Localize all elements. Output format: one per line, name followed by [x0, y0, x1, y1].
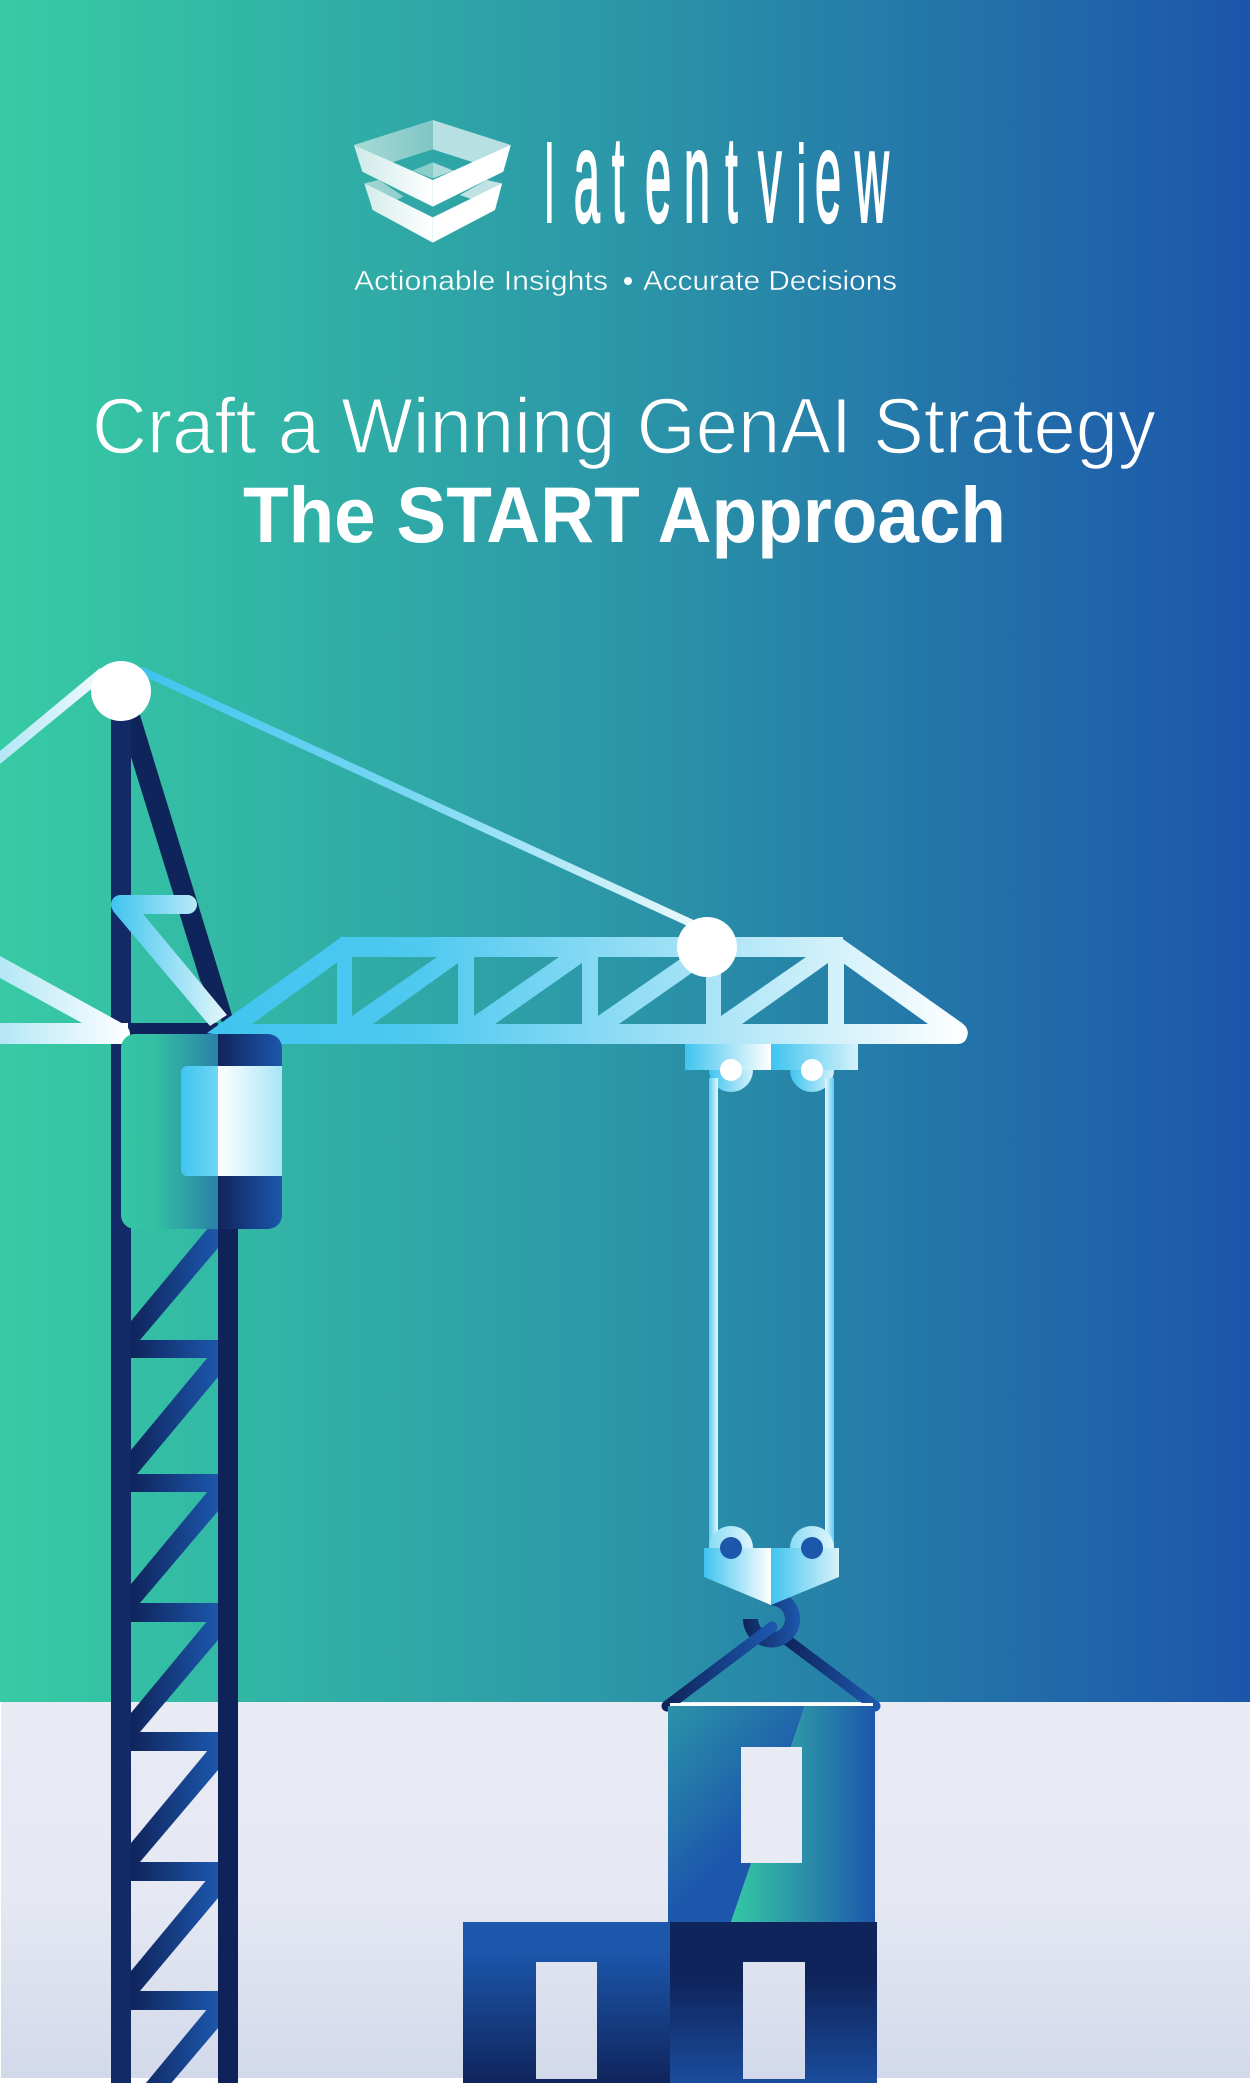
logo wordmark: w — [855, 104, 889, 249]
hook block — [704, 1526, 839, 1605]
logo wordmark: l — [545, 126, 554, 245]
tagline: Actionable Insights — [354, 265, 608, 296]
containers — [463, 1703, 877, 2083]
heading line two: The START Approach — [243, 470, 1006, 559]
logo wordmark: i — [797, 126, 806, 245]
lower right container — [670, 1922, 877, 2083]
lower left container — [463, 1922, 670, 2083]
hook — [750, 1598, 792, 1640]
main cable — [140, 670, 695, 925]
hoist ropes — [709, 1078, 834, 1548]
logo wordmark: v — [758, 104, 782, 249]
back jib upper tie — [0, 668, 112, 764]
boom pivot — [677, 917, 737, 977]
tagline — [354, 265, 897, 296]
right mast — [218, 1200, 238, 2083]
mast lattice — [131, 1216, 218, 2083]
logo wordmark: t — [725, 112, 738, 248]
trolley — [685, 1044, 858, 1092]
tagline: Accurate Decisions — [643, 265, 897, 296]
sling top line — [670, 1703, 873, 1706]
logo wordmark: n — [684, 104, 710, 249]
dark brace — [131, 700, 232, 1028]
heading line one: Craft a Winning GenAI Strategy — [92, 381, 1156, 470]
logo icon — [354, 120, 511, 243]
small arm — [111, 895, 227, 1026]
logo — [354, 104, 897, 296]
logo wordmark: e — [815, 104, 841, 249]
right sling — [787, 1640, 875, 1706]
operator cab — [121, 1034, 282, 1229]
upper container — [668, 1706, 875, 1922]
dark cross bar — [131, 1023, 218, 1035]
crane — [0, 661, 968, 2083]
title — [92, 381, 1156, 559]
boom truss — [207, 936, 968, 1044]
ground — [1, 1702, 1250, 2078]
logo wordmark: a — [574, 104, 600, 249]
top pivot — [91, 661, 151, 721]
logo wordmark: e — [645, 104, 671, 249]
cab window — [181, 1066, 282, 1176]
left mast — [111, 700, 131, 2083]
left sling — [667, 1627, 772, 1706]
back jib lower — [0, 956, 130, 1044]
logo wordmark: t — [612, 112, 624, 248]
